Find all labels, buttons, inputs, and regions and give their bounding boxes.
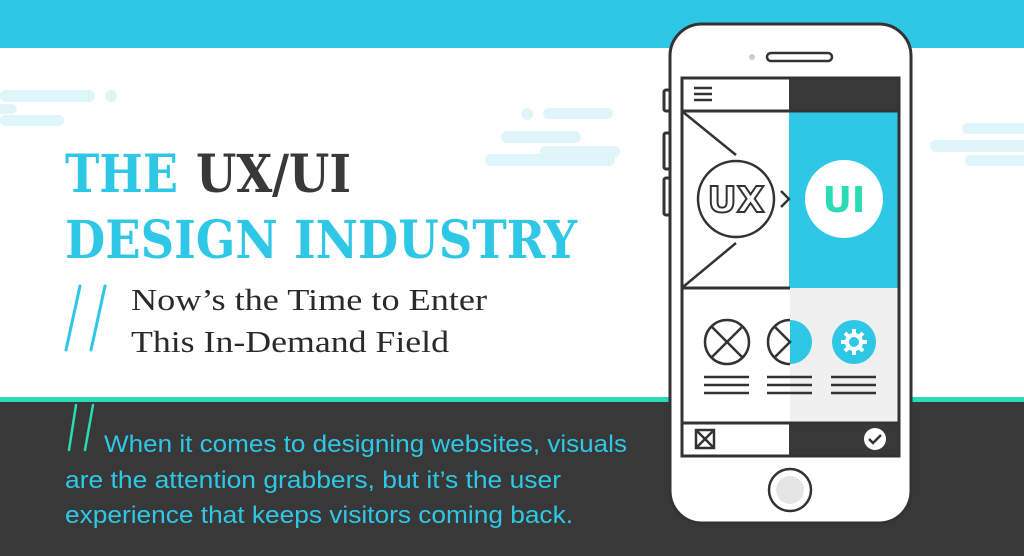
icons row	[705, 320, 876, 364]
subtitle	[66, 282, 488, 359]
title: UX/UI	[196, 144, 351, 205]
image checkbox	[696, 430, 714, 448]
title	[65, 144, 578, 271]
speaker & camera	[749, 53, 832, 61]
top band	[0, 0, 1024, 48]
menu icon	[694, 88, 712, 100]
cloud right	[485, 108, 620, 166]
home button	[769, 469, 811, 511]
intro text: experience that keeps visitors coming back.	[65, 502, 573, 529]
title: THE	[65, 144, 178, 205]
UI circle: UI	[823, 180, 865, 221]
intro text: When it comes to designing websites, visuals	[104, 431, 627, 458]
side buttons	[664, 90, 670, 215]
check circle	[864, 428, 886, 450]
cloud left	[0, 90, 117, 126]
UX circle	[698, 161, 789, 237]
cloud far right	[930, 123, 1024, 166]
phone	[664, 24, 911, 523]
screen	[682, 78, 899, 456]
intro text	[65, 405, 627, 529]
UX circle: UX	[708, 180, 765, 221]
intro text: are the attention grabbers, but it’s the user	[65, 467, 561, 494]
text lines	[704, 377, 876, 393]
subtitle: This In-Demand Field	[131, 324, 450, 359]
subtitle: Now’s the Time to Enter	[131, 282, 488, 317]
phone body	[670, 24, 911, 523]
UI circle	[805, 160, 883, 238]
title: DESIGN INDUSTRY	[65, 210, 578, 271]
bottom dark panel	[0, 397, 1024, 556]
wireframe lines	[683, 112, 736, 287]
